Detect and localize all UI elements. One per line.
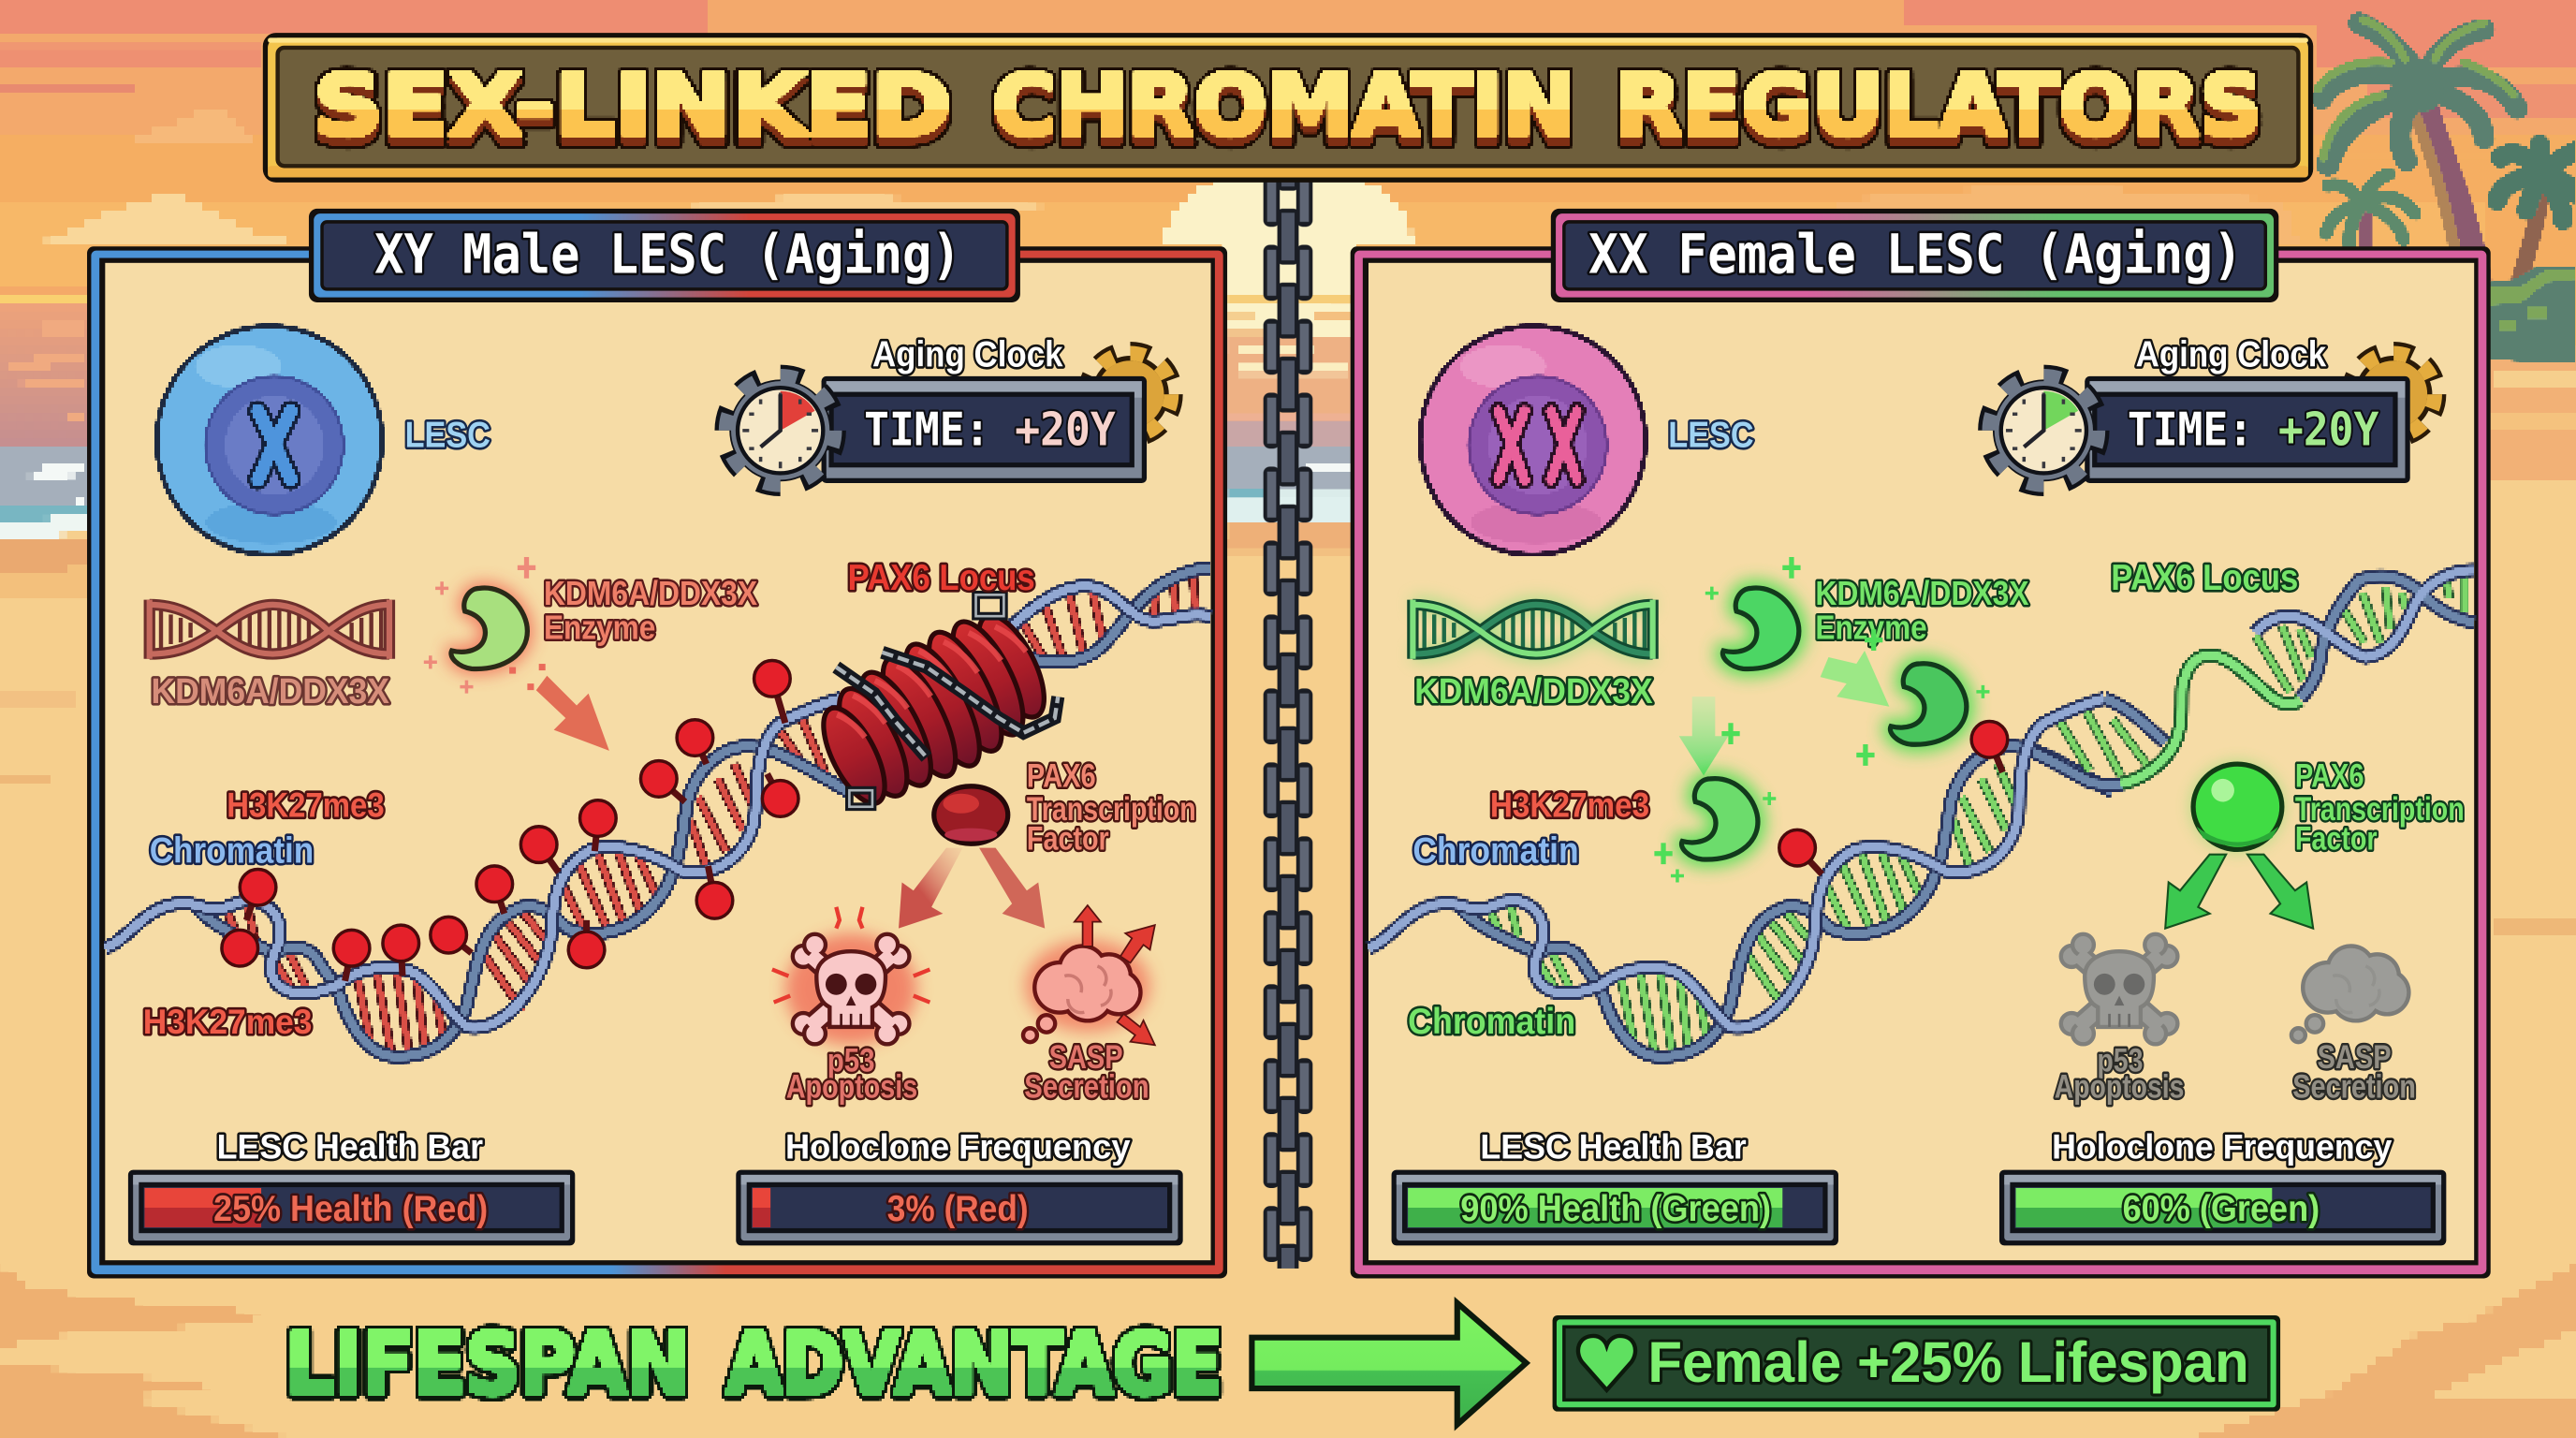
icon: male LESC cell [154,324,385,557]
TF label: Transcription [2295,791,2465,828]
p53 label: Apoptosis [786,1068,917,1105]
title text: CHROMATIN [992,55,1575,155]
title text: SEX-LINKED [314,64,951,164]
LESC health bar: 25% [128,1127,575,1245]
icon: active gene DNA [1412,600,1653,659]
sky colour [0,0,707,33]
arrows to p53 and SASP [2165,855,2313,929]
icon: silenced gene DNA [150,600,389,659]
big green arrow [1251,1303,1526,1425]
residual methylation pins [1779,721,2008,874]
chromatin label green: Chromatin [1408,1002,1575,1042]
aging clock label: Aging Clock [872,334,1063,374]
icon: female LESC cell [1418,324,1647,557]
icon: SASP cloud (active) [1025,905,1155,1045]
p53 label [786,1042,917,1105]
chromatin helix: open [1368,570,2474,1057]
panel heading tab: XY Male LESC (Aging) [374,222,961,286]
SASP label [1024,1039,1149,1105]
enzyme label: Enzyme [1815,609,1927,647]
dashed red arrow: blocked enzyme [509,664,607,749]
right palm [2497,144,2576,289]
aging clock widget: TIME: +20Y [864,403,1116,457]
title text: REGULATORS [1615,64,2262,164]
p53 label: p53 [2097,1042,2144,1078]
SASP label: SASP [2318,1039,2392,1076]
p53 label: Apoptosis [2055,1068,2184,1105]
p53 label [2055,1042,2184,1105]
PAX6 locus label: PAX6 Locus [2111,558,2298,598]
TF label: Factor [2295,820,2378,857]
LESC label: LESC [1668,415,1754,455]
SASP label: Secretion [1024,1068,1149,1105]
title text: CHROMATIN [992,64,1575,164]
arrows to p53 and SASP [899,848,1045,929]
gene label: KDM6A/DDX3X [1414,671,1653,711]
enzyme label: KDM6A/DDX3X [544,574,757,612]
SASP label [2292,1039,2416,1105]
title banner [263,33,2313,183]
small palm [2326,174,2415,246]
TF label: PAX6 [2295,758,2364,795]
H3K27me3 label bottom: H3K27me3 [143,1003,312,1041]
holoclone frequency bar: 60%: Holoclone Frequency [2052,1127,2393,1166]
aging clock widget [726,353,1171,485]
title text: SEX-LINKED [314,55,951,155]
gene label: KDM6A/DDX3X [151,671,389,711]
title text: SEX-LINKED [314,55,951,155]
aging clock widget [1989,353,2435,485]
lifespan advantage heading: LIFESPAN [285,1313,690,1414]
callout text: Female +25% Lifespan [1647,1330,2249,1395]
lifespan advantage heading: ADVANTAGE [726,1313,1222,1414]
chromatin label: Chromatin [150,830,314,871]
enzyme label [544,574,757,647]
icon: PAX6 transcription factor (repressed) [934,786,1008,844]
holoclone frequency bar: 3%: Holoclone Frequency [785,1127,1131,1166]
lifespan advantage heading [285,1313,1222,1414]
panel: XY male LESC [87,209,1227,1278]
p53 label: p53 [827,1042,875,1078]
panel heading tab [1551,209,2278,302]
panel heading tab: XX Female LESC (Aging) [1588,222,2243,286]
chain divider [1264,174,1312,1269]
holoclone frequency bar: 60% [1999,1127,2446,1245]
palm trees [2318,20,2576,361]
icon: PAX6 transcription factor (active) [2191,762,2284,851]
aging clock label: Aging Clock [2136,334,2327,374]
chromatin helix: heavily methylated [105,568,1211,1057]
callout: female lifespan advantage [1553,1315,2280,1412]
icon: SASP cloud (inactive) [2293,948,2407,1040]
center gap details [1225,246,1354,357]
TF label: PAX6 [1027,758,1096,795]
enzyme label: Enzyme [544,609,655,647]
TF label [2295,758,2465,857]
TF label [1027,758,1196,857]
holoclone frequency bar: 3%: 3% (Red) [887,1189,1029,1229]
title text [314,55,2262,164]
chromatin label blue: Chromatin [1412,830,1579,871]
icon: active enzymes [1654,557,1989,882]
methylation marks: H3K27me3 pins [222,661,798,981]
LESC health bar: 90%: LESC Health Bar [1480,1127,1747,1166]
holoclone frequency bar: 3% [736,1127,1183,1245]
icon: heart [1578,1336,1635,1390]
SASP label: Secretion [2292,1068,2416,1105]
title text: SEX-LINKED [314,64,951,164]
coiled locus with chains [802,594,1064,821]
bush [2487,266,2576,361]
H3K27me3 label: H3K27me3 [1490,785,1649,824]
aging clock widget: TIME: +20Y [2128,403,2379,457]
icon: weak enzyme [424,557,535,694]
panel frame [87,246,1227,1278]
enzyme activity arrows [1679,651,1889,775]
LESC health bar: 90%: 90% Health (Green) [1460,1189,1771,1229]
lifespan advantage heading: ADVANTAGE [726,1313,1222,1414]
LESC health bar: 90% [1392,1127,1838,1245]
panel frame [1351,246,2491,1278]
title text: CHROMATIN [992,55,1575,155]
lifespan advantage heading: LIFESPAN [285,1313,690,1414]
holoclone frequency bar: 60%: 60% (Green) [2123,1189,2320,1229]
title text: CHROMATIN [992,64,1575,164]
icon: p53 apoptosis skull (active) [772,907,929,1045]
panel: XX female LESC [1351,209,2491,1278]
PAX6 locus label: PAX6 Locus [848,558,1035,598]
LESC health bar: 25%: LESC Health Bar [217,1127,483,1166]
title text: REGULATORS [1615,55,2262,155]
icon: p53 skull (inactive) [2061,934,2177,1044]
panel heading tab [309,209,1020,302]
enzyme label [1815,574,2029,647]
title text: REGULATORS [1615,55,2262,155]
H3K27me3 label top: H3K27me3 [227,785,385,824]
LESC health bar: 25%: 25% Health (Red) [213,1189,488,1229]
LESC label: LESC [405,415,490,455]
SASP label: SASP [1049,1039,1123,1076]
title text: REGULATORS [1615,64,2262,164]
big palm [2318,20,2517,283]
TF label: Transcription [1027,791,1196,828]
TF label: Factor [1027,820,1109,857]
enzyme label: KDM6A/DDX3X [1815,574,2029,612]
